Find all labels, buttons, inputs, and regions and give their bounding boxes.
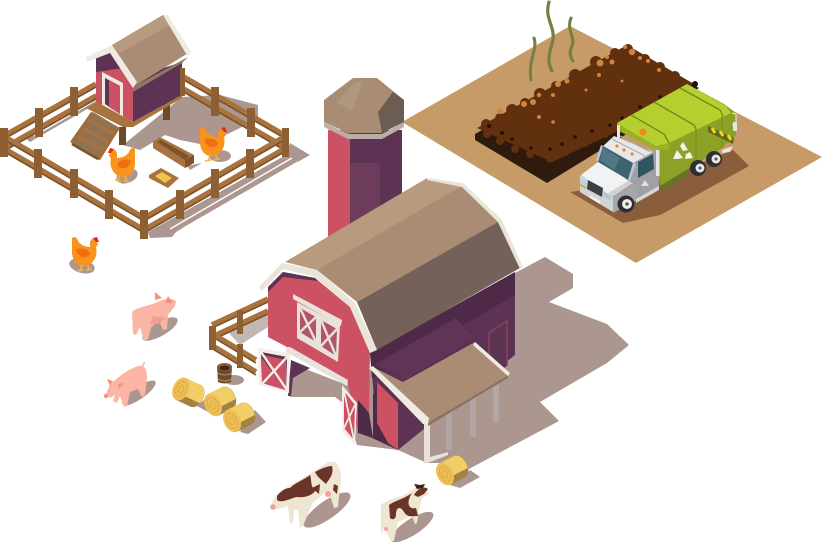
back right rails <box>182 76 286 148</box>
hen outside <box>68 237 99 276</box>
hay bale 2 <box>200 383 240 419</box>
left hinged door <box>258 348 290 393</box>
hen in pen left <box>108 148 140 186</box>
truck body <box>617 84 737 191</box>
lean-to posts <box>424 383 499 464</box>
silo <box>324 78 404 246</box>
pig lower <box>104 362 159 409</box>
cab recycle symbol <box>641 180 649 186</box>
hay bale 3 <box>219 399 259 435</box>
front rails <box>3 136 144 230</box>
garbage truck <box>579 84 737 213</box>
bucket <box>217 363 244 385</box>
pig upper <box>132 292 181 345</box>
compost pile <box>475 44 699 183</box>
barn fence <box>209 299 268 375</box>
chicken coop <box>71 14 191 160</box>
barn shadow <box>290 257 629 470</box>
feed box <box>149 168 179 188</box>
hay bale 1 <box>169 375 208 410</box>
ramp <box>71 112 118 160</box>
door lintel <box>286 347 348 386</box>
lean-to <box>358 318 510 464</box>
back left rails <box>4 84 96 148</box>
right hinged door <box>342 385 357 445</box>
coop floor <box>86 95 182 127</box>
hen in pen right <box>200 127 231 162</box>
right wall <box>370 272 515 450</box>
steam <box>530 2 573 80</box>
coop door <box>102 72 123 118</box>
cow right <box>381 484 437 543</box>
truck shadow <box>570 150 749 223</box>
window <box>293 294 342 362</box>
truck cab <box>579 125 660 213</box>
back posts <box>35 68 255 137</box>
front posts <box>0 128 289 239</box>
compost yard ground <box>402 26 822 263</box>
front wall <box>268 272 372 438</box>
silo roof <box>324 78 404 139</box>
small side door <box>489 321 507 378</box>
chicken run fence <box>0 68 289 239</box>
hay bales <box>169 375 480 488</box>
barn door opening <box>288 360 310 396</box>
chicken run shadows <box>23 93 310 238</box>
cow left <box>270 462 355 533</box>
bale shadows <box>197 398 480 488</box>
hay bale 4 <box>432 452 472 488</box>
truck rear wheels <box>690 151 722 176</box>
feed trough <box>153 137 202 170</box>
coop roof <box>86 14 191 92</box>
recycle symbol <box>673 142 693 159</box>
barn <box>258 178 523 464</box>
main roof <box>259 178 523 353</box>
coop stilts <box>119 103 170 145</box>
